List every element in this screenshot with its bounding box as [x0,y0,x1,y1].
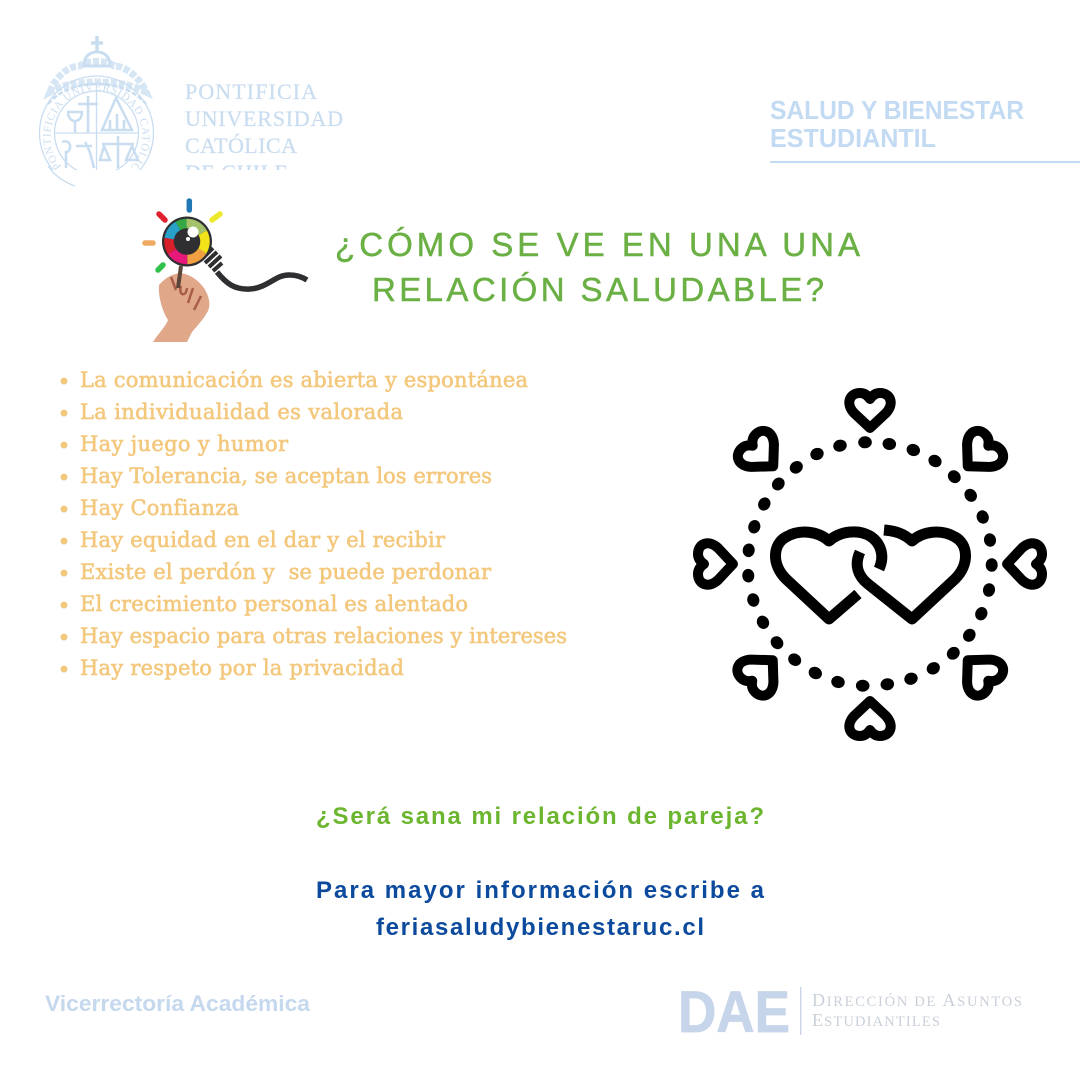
header: Salud y Bienestar Estudiantil: ESTUDIANTIL [770,123,936,153]
logo wordmark: university name: CATÓLICA [185,133,297,158]
title [335,226,860,308]
header: Salud y Bienestar Estudiantil: SALUD Y BIENESTAR [770,95,1024,125]
bullet list: signs of a healthy relationship: La comunicación es abierta y espontánea [80,368,528,392]
logo wordmark: university name: DE CHILE [185,160,288,185]
contact text [316,877,765,941]
footer logo: DAE: DAE [678,980,790,1045]
bullet list: signs of a healthy relationship: Hay juego y humor [80,432,289,456]
icon: hand holding colourful light bulb [145,201,307,342]
footer logo: DAE: DIRECCIÓN DE ASUNTOS [812,990,1022,1010]
bullet list: signs of a healthy relationship: Hay Tolerancia, se aceptan los errores [80,464,492,488]
header: Salud y Bienestar Estudiantil [770,95,1080,163]
logo wordmark: university name [185,84,342,170]
bullet list: signs of a healthy relationship: El crecimiento personal es alentado [80,592,468,616]
bullet list: signs of a healthy relationship: Hay equidad en el dar y el recibir [80,528,446,552]
bullet list: signs of a healthy relationship [60,368,567,680]
dotted ring [742,436,998,692]
bullet list: signs of a healthy relationship: Hay Confianza [80,496,239,520]
question line: ¿Será sana mi relación de pareja? [316,803,764,830]
footer: Vicerrectoría Académica: Vicerrectoría Académica [45,991,310,1016]
bullet list: signs of a healthy relationship: Existe el perdón y se puede perdonar [80,560,492,584]
bullet list: signs of a healthy relationship: Hay espacio para otras relaciones y intereses [80,624,567,648]
footer logo: DAE: ESTUDIANTILES [812,1010,940,1030]
logo: Pontificia Universidad Católica crest [38,36,154,186]
bullet list: signs of a healthy relationship: Hay respeto por la privacidad [80,656,404,680]
small hearts around the ring [698,393,1042,736]
bullet list: signs of a healthy relationship: La individualidad es valorada [80,400,403,424]
title: ¿CÓMO SE VE EN UNA UNA [335,226,860,263]
title: RELACIÓN SALUDABLE? [372,271,824,308]
contact text: Para mayor información escribe a [316,877,765,904]
logo wordmark: university name: PONTIFICIA [185,79,317,104]
footer logo: DAE [678,980,1022,1045]
icon: interlinked hearts in dotted ring of hearts [698,393,1042,736]
contact text: feriasaludybienestaruc.cl [376,914,704,941]
interlinked hearts [775,530,966,619]
logo wordmark: university name: UNIVERSIDAD [185,106,343,131]
